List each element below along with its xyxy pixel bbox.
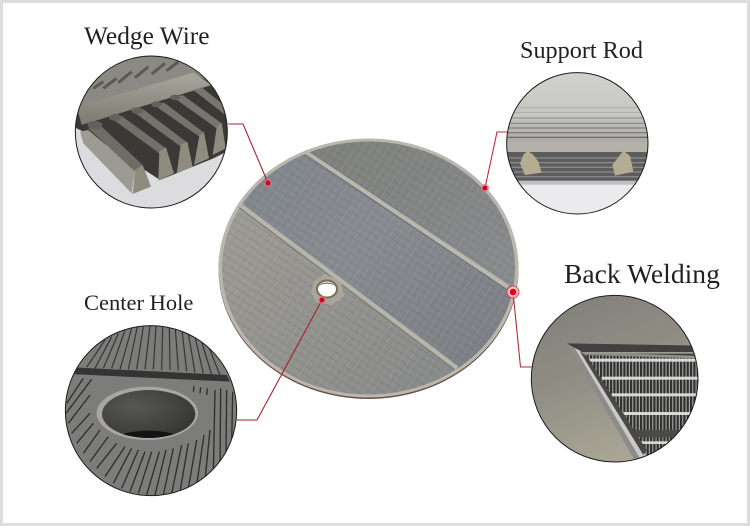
callout: back welding [507, 258, 720, 463]
support rod profiles [520, 151, 542, 175]
heading: back welding: Back Welding [564, 258, 720, 289]
lower panel [222, 208, 458, 394]
marker dot: back welding [507, 286, 519, 298]
marker dot: support rod [481, 184, 489, 192]
frame diagonal [567, 343, 647, 461]
callout: center hole [63, 290, 326, 498]
heading: center hole: Center Hole [84, 290, 193, 315]
photo circle: center hole [63, 323, 240, 498]
heading: support rod: Support Rod [520, 37, 643, 64]
central wedge wire disc [218, 138, 518, 399]
photo circle: back welding [530, 293, 702, 463]
weld strip upper [305, 152, 508, 287]
marker dot: wedge wire [264, 179, 272, 187]
screen panel [585, 355, 698, 455]
callout: support rod [481, 37, 653, 217]
leader line: back welding [513, 292, 532, 367]
heading: wedge wire: Wedge Wire [84, 22, 209, 50]
leader line: support rod [485, 132, 507, 188]
leader line: wedge wire [228, 124, 268, 183]
hole [97, 387, 198, 440]
middle panel [242, 154, 511, 368]
callout: wedge wire [73, 22, 272, 210]
weld strip lower [240, 205, 457, 368]
marker dot: center hole [318, 296, 326, 304]
photo circle: wedge wire [73, 53, 230, 210]
frame top [567, 343, 700, 356]
photo circle: support rod [503, 70, 653, 217]
top panel [310, 142, 515, 288]
leader line: center hole [237, 300, 322, 420]
wedge bars [80, 130, 135, 193]
centre hole [311, 274, 344, 305]
